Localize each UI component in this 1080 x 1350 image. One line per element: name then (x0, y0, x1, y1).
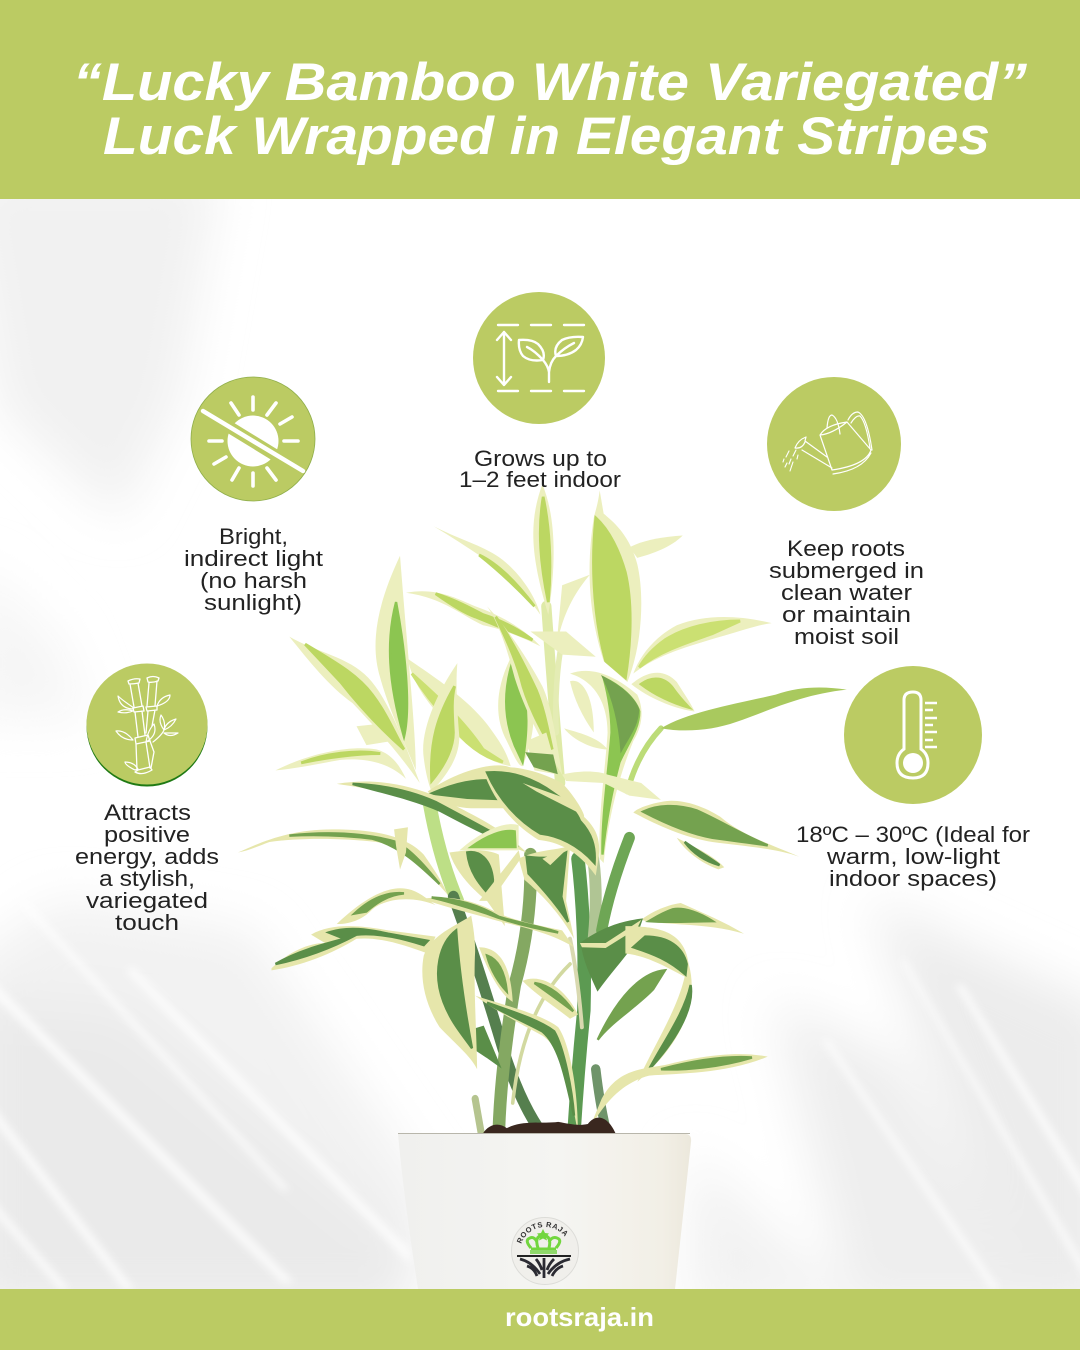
icon: thermometer (844, 666, 982, 804)
text: benefits: a stylish, (99, 866, 195, 891)
title (73, 53, 1028, 166)
icon: no harsh sun (191, 377, 315, 501)
footer website: rootsraja.in (505, 1302, 654, 1332)
icon: watering can (767, 377, 901, 511)
text: light: (no harsh (200, 568, 307, 593)
text: benefits (75, 800, 219, 935)
soil (483, 1118, 616, 1133)
dark variegated lower leaves (238, 765, 799, 1132)
title: Luck Wrapped in Elegant Stripes (103, 107, 990, 166)
text: temperature: warm, low-light (826, 844, 1001, 869)
text: temperature (796, 822, 1031, 891)
text: light (184, 524, 324, 615)
text: benefits: positive (104, 822, 190, 847)
plant: lucky bamboo (238, 484, 847, 1133)
text: benefits: touch (115, 910, 179, 935)
pot logo: Roots Raja (511, 1217, 579, 1285)
text: water: Keep roots (787, 536, 905, 561)
text: height: 1–2 feet indoor (459, 467, 622, 492)
light upper leaves (275, 484, 847, 863)
text: water: moist soil (794, 624, 899, 649)
plant stems (430, 606, 661, 1132)
icon: plant height (473, 292, 605, 424)
pot (398, 1133, 691, 1289)
text: benefits: variegated (86, 888, 208, 913)
text: height (459, 446, 622, 492)
text: light: Bright, (219, 524, 288, 549)
text: temperature: indoor spaces) (829, 866, 997, 891)
text: benefits: Attracts (104, 800, 191, 825)
text: temperature: 18ºC – 30ºC (Ideal for (796, 822, 1031, 847)
text: water: or maintain (782, 602, 911, 627)
text: light: indirect light (184, 546, 324, 571)
text: benefits: energy, adds (75, 844, 219, 869)
text: light: sunlight) (204, 590, 302, 615)
pot logo: Roots Raja: ROOTS RAJA (516, 1222, 568, 1244)
text: water: submerged in (769, 558, 924, 583)
text: water: clean water (781, 580, 913, 605)
icon: bamboo (86, 664, 208, 786)
text: height: Grows up to (474, 446, 607, 471)
text: water (769, 536, 924, 649)
header band (0, 0, 1080, 199)
title: “Lucky Bamboo White Variegated” (73, 53, 1028, 112)
footer band (0, 1289, 1080, 1350)
